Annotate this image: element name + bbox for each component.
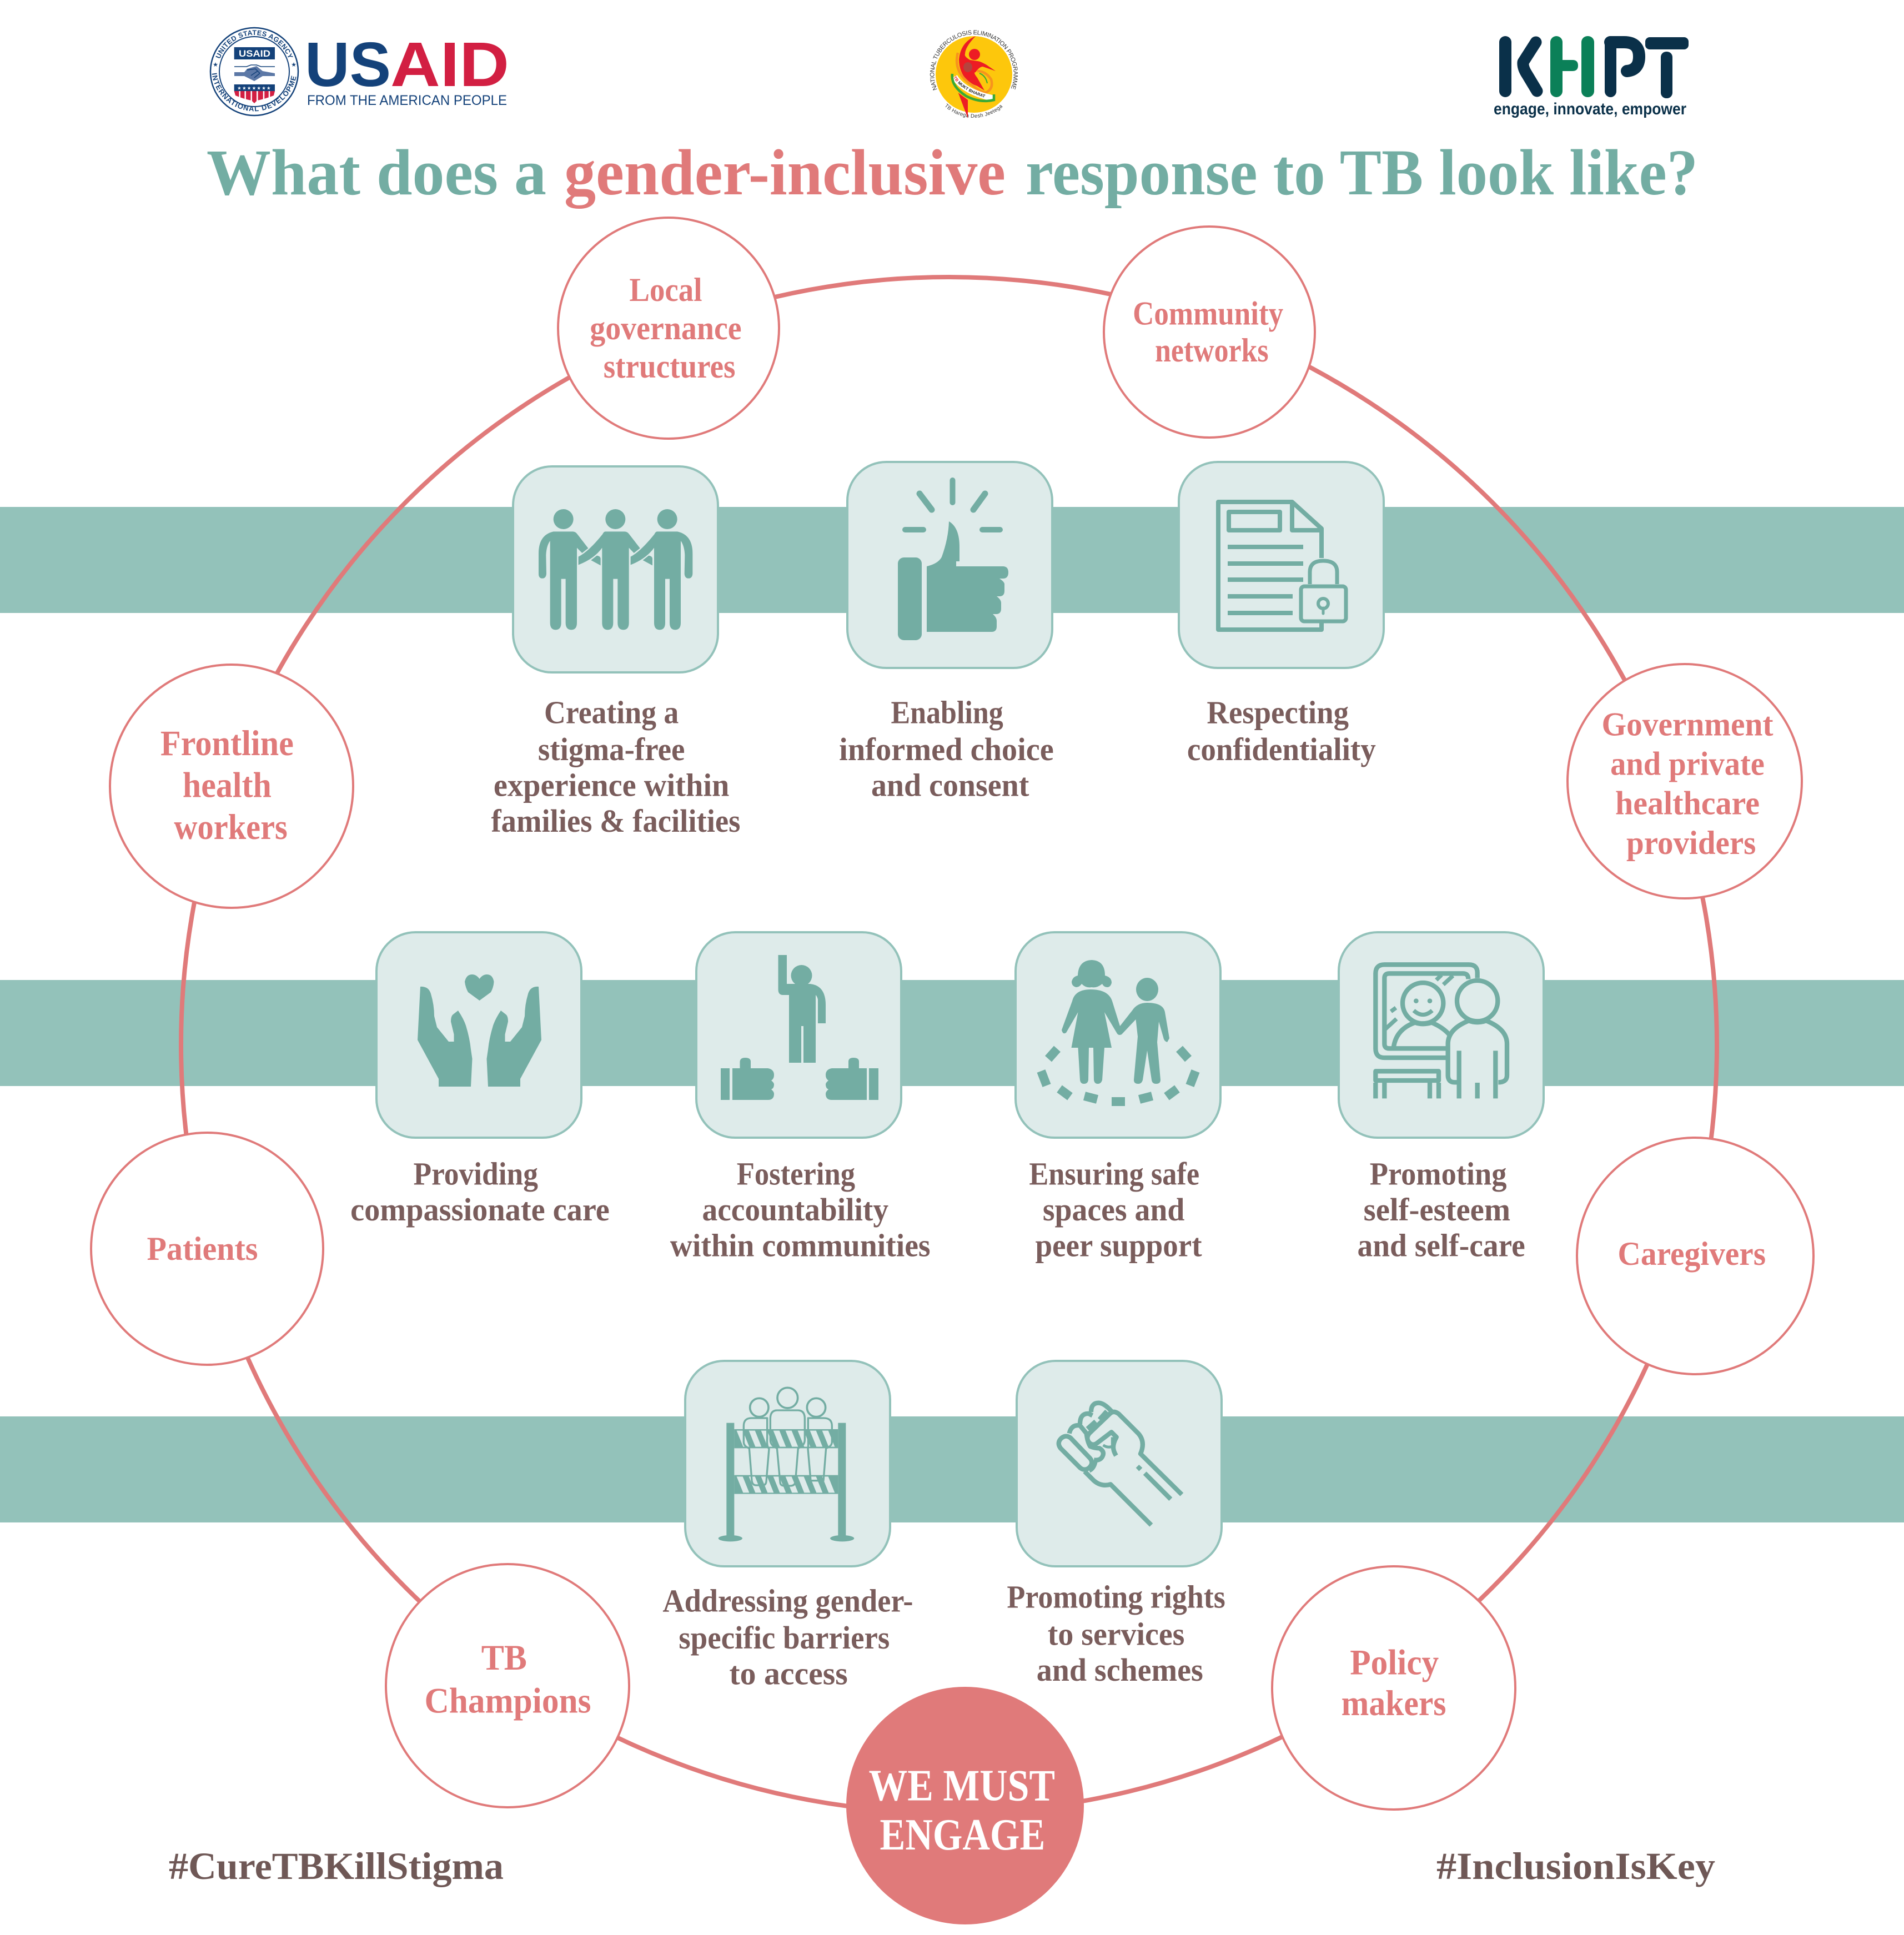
label: stigma-free: [538, 732, 685, 767]
label: to access: [729, 1656, 848, 1691]
panel: stigma-free experience: [491, 466, 740, 839]
panel: gender-specific barriers: [662, 1361, 913, 1691]
node: Government and private healthcare providers: and private: [1610, 746, 1765, 782]
node: Government and private healthcare providers: Government: [1602, 706, 1773, 742]
node: We must engage: [846, 1687, 1084, 1924]
label: [1029, 1157, 1202, 1263]
node: Frontline health workers: Frontline: [160, 723, 294, 763]
label: Ensuring safe: [1029, 1157, 1199, 1192]
node: TB Champions: Champions: [424, 1681, 591, 1721]
node: Community networks: networks: [1155, 332, 1269, 369]
hashtag: CureTBKillStigma: #CureTBKillStigma: [169, 1845, 504, 1887]
title: What does a: [207, 136, 546, 209]
logo: KHPT: [1494, 36, 1689, 118]
title: gender-inclusive: [564, 136, 1006, 209]
node: Caregivers: [1577, 1138, 1813, 1374]
node: Patients: Patients: [147, 1230, 258, 1267]
title: [207, 136, 1698, 209]
label: to services: [1048, 1617, 1184, 1652]
node: We must engage: ENGAGE: [880, 1811, 1045, 1859]
label: informed choice: [839, 732, 1054, 767]
icon: three people holding hands: [539, 509, 692, 630]
panel: accountability: [670, 932, 931, 1263]
logo wordmark: [305, 29, 509, 108]
logo: National TB Elimination Programme: NATIONAL TUBERCULOSIS ELIMINATION PROGRAMME: [930, 30, 1018, 91]
node: Caregivers: Caregivers: [1617, 1235, 1766, 1272]
icon: USAID seal: ★: [213, 61, 218, 68]
label: [839, 695, 1054, 803]
node: Frontline health workers: health: [183, 766, 272, 805]
node: TB Champions: TB: [481, 1638, 527, 1677]
icon: USAID seal: ★★★★★★★: [237, 86, 272, 91]
label: Promoting: [1370, 1157, 1507, 1192]
panel: confidentiality: [1179, 462, 1384, 767]
panel: rights to services: [1007, 1361, 1225, 1688]
label: compassionate care: [350, 1193, 610, 1228]
label: Addressing gender-: [662, 1584, 913, 1619]
panel: informed choice: [839, 462, 1054, 803]
label: [662, 1584, 913, 1691]
icon: woman and child in dashed circle: [1041, 960, 1195, 1102]
icon: document with padlock: [1218, 502, 1346, 630]
panel: self-esteem: [1339, 932, 1544, 1263]
label: Providing: [413, 1157, 538, 1192]
label: and self-care: [1358, 1228, 1525, 1263]
icon: thumbs up: [898, 480, 1008, 640]
node: Local governance structures: structures: [604, 348, 735, 385]
label: [350, 1157, 610, 1228]
node: Policy makers: [1272, 1566, 1515, 1810]
icon: person with raised hand and thumbs: [721, 955, 878, 1100]
engagement ring: [181, 277, 1717, 1813]
icon: USAID seal: [210, 27, 299, 117]
band: row 1: [0, 507, 1904, 613]
label: Enabling: [891, 695, 1003, 730]
icon: hands and heart: [418, 974, 541, 1087]
node: We must engage: WE MUST: [868, 1761, 1055, 1810]
logo: National TB Elimination Programme: [930, 30, 1018, 118]
node: Patients: [91, 1133, 323, 1365]
node: Local governance structures: Local: [629, 272, 702, 308]
icon: USAID seal: ★: [291, 61, 297, 68]
node: Government and private healthcare providers: providers: [1626, 825, 1756, 861]
hashtag: InclusionIsKey: #InclusionIsKey: [1436, 1845, 1715, 1887]
band: row 3: [0, 1416, 1904, 1522]
label: Promoting rights: [1007, 1580, 1225, 1615]
label: confidentiality: [1187, 732, 1376, 767]
node: Policy makers: Policy: [1350, 1643, 1439, 1682]
node: Local governance structures: [558, 218, 779, 439]
label: Respecting: [1207, 695, 1349, 730]
logo: National TB Elimination Programme: TB MUKT BHARAT: [954, 76, 986, 98]
label: self-esteem: [1364, 1193, 1510, 1228]
node: Frontline health workers: [110, 665, 353, 908]
logo wordmark: AID: [390, 29, 509, 99]
label: Creating a: [544, 695, 679, 730]
label: specific barriers: [679, 1621, 890, 1656]
icon: person before mirror: [1375, 964, 1507, 1098]
label: [670, 1157, 931, 1263]
logo: National TB Elimination Programme: TB Harega Desh Jeetega: [945, 103, 1003, 118]
node: Community networks: Community: [1133, 295, 1283, 331]
icon: raised fist: [1059, 1403, 1182, 1525]
label: families & facilities: [491, 804, 740, 839]
icon: USAID seal: UNITED STATES AGENCY: [215, 30, 293, 58]
node: Local governance structures: governance: [590, 310, 742, 346]
label: and schemes: [1037, 1653, 1203, 1688]
node: Frontline health workers: workers: [174, 807, 288, 847]
label: [1187, 695, 1376, 767]
panel: compassionate care: [350, 932, 610, 1228]
label: Fostering: [737, 1157, 855, 1192]
logo: KHPT: engage, innovate, empower: [1494, 100, 1686, 118]
label: [1358, 1157, 1525, 1263]
icon: people behind barricade: [719, 1388, 854, 1541]
logo wordmark: FROM THE AMERICAN PEOPLE: [307, 93, 507, 108]
label: [491, 695, 740, 839]
label: spaces and: [1043, 1193, 1184, 1228]
node: TB Champions: [386, 1564, 629, 1807]
band: row 2: [0, 980, 1904, 1086]
label: experience within: [494, 768, 729, 803]
node: Community networks: [1104, 227, 1315, 438]
title: response to TB look like?: [1026, 136, 1698, 209]
node: Government and private healthcare providers: [1568, 664, 1802, 898]
label: within communities: [670, 1228, 931, 1263]
logo: USAID: [210, 27, 509, 117]
label: [1007, 1580, 1225, 1688]
label: accountability: [702, 1193, 888, 1228]
icon: USAID seal: USAID: [239, 48, 270, 59]
label: peer support: [1036, 1228, 1202, 1263]
label: and consent: [871, 768, 1029, 803]
node: Policy makers: makers: [1342, 1683, 1446, 1723]
node: Government and private healthcare providers: healthcare: [1615, 785, 1760, 822]
panel: safe spaces: [1016, 932, 1220, 1263]
logo wordmark: US: [305, 29, 391, 99]
